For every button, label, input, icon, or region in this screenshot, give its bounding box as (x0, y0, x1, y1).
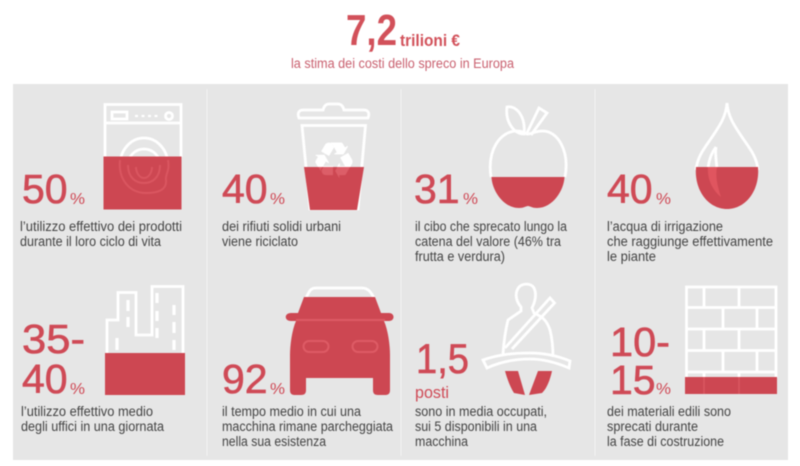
text: description (222, 219, 341, 249)
stat: 40%: % (270, 191, 285, 208)
text: description: degli uffici in una giornata (21, 419, 164, 434)
panel: seat belt (415, 284, 570, 449)
icon: seat belt (483, 284, 570, 395)
stat: 10-15%: % (656, 381, 671, 398)
stat: 1,5 posti (415, 335, 469, 402)
stat: 10-15%: 15 (610, 357, 656, 403)
icon: bin with recycling symbol: ♻ (312, 132, 356, 190)
stat: 35-40%: 40 (22, 356, 68, 402)
text: description: sprecati durante (607, 419, 698, 434)
text: description (415, 404, 547, 449)
icon: bin with recycling symbol (298, 104, 369, 210)
stat: 31%: % (463, 191, 478, 208)
icon: bin with recycling symbol: ♻ (312, 132, 356, 190)
stat: 35-40%: 35- (22, 316, 85, 362)
text: description: frutta e verdura) (415, 249, 505, 264)
icon: brick wall (685, 287, 777, 394)
stat: 10-15%: 10- (610, 319, 670, 365)
text: description: catena del valore (46% tra (415, 234, 561, 249)
text: description: dei rifiuti solidi urbani (222, 219, 341, 234)
text: description: il tempo medio in cui una (222, 404, 361, 419)
text: description: la fase di costruzione (607, 434, 724, 449)
text: description: durante il loro ciclo di vita (20, 234, 161, 249)
text: description: sui 5 disponibili in una (415, 419, 537, 434)
title: trilioni € (400, 31, 460, 50)
text: description: macchina rimane parcheggiata (222, 419, 393, 434)
text: description (222, 404, 393, 449)
stat: 40%: 40 (222, 166, 268, 212)
text: description: nella sua esistenza (222, 434, 326, 449)
stat: 92%: % (270, 381, 285, 398)
text: description (20, 219, 182, 249)
stat: 50%: % (70, 191, 85, 208)
text: description: dei materiali edili sono (607, 404, 731, 419)
panel: grey background (13, 84, 788, 460)
text: description: l’utilizzo effettivo dei prodotti (20, 219, 182, 234)
panel: offices (21, 286, 185, 434)
stat: 50%: 50 (22, 166, 68, 212)
text: description (607, 404, 731, 449)
text: description: che raggiunge effettivamente (607, 234, 773, 249)
panel: bricks (607, 287, 777, 449)
stat: 35-40% (22, 316, 85, 402)
icon: office buildings (105, 286, 185, 395)
panel: apple (414, 107, 567, 264)
subtitle: la stima dei costi dello spreco in Europa (291, 56, 514, 71)
stat: 1,5 posti: posti (415, 383, 449, 402)
stat: 10-15% (610, 319, 671, 403)
text: description: le piante (607, 249, 656, 264)
stat: 31%: 31 (414, 166, 460, 212)
stat: 40%: % (656, 191, 671, 208)
text: description: l’acqua di irrigazione (607, 219, 723, 234)
text: description: macchina (415, 434, 468, 449)
stat: 35-40%: % (70, 381, 85, 398)
icon: apple (490, 107, 566, 208)
text: description: l’utilizzo effettivo medio (21, 404, 153, 419)
stat: 40%: 40 (607, 166, 653, 212)
panel: car (222, 288, 394, 449)
panel: waste bin (222, 104, 369, 249)
panel: washing machine (20, 104, 182, 249)
text: description (21, 404, 164, 434)
text: description: sono in media occupati, (415, 404, 547, 419)
text: description: viene riciclato (222, 234, 298, 249)
icon: washing machine (104, 104, 182, 210)
title (346, 6, 460, 55)
title: 7,2 (346, 6, 397, 55)
text: description: il cibo che sprecato lungo la (415, 219, 567, 234)
icon: car (286, 288, 394, 395)
text: description (415, 219, 567, 264)
stat: 1,5 posti: 1,5 (416, 335, 469, 382)
stat: 92%: 92 (222, 356, 268, 402)
panel: water drop (607, 103, 773, 264)
icon: water drop (696, 103, 758, 209)
text: description (607, 219, 773, 264)
